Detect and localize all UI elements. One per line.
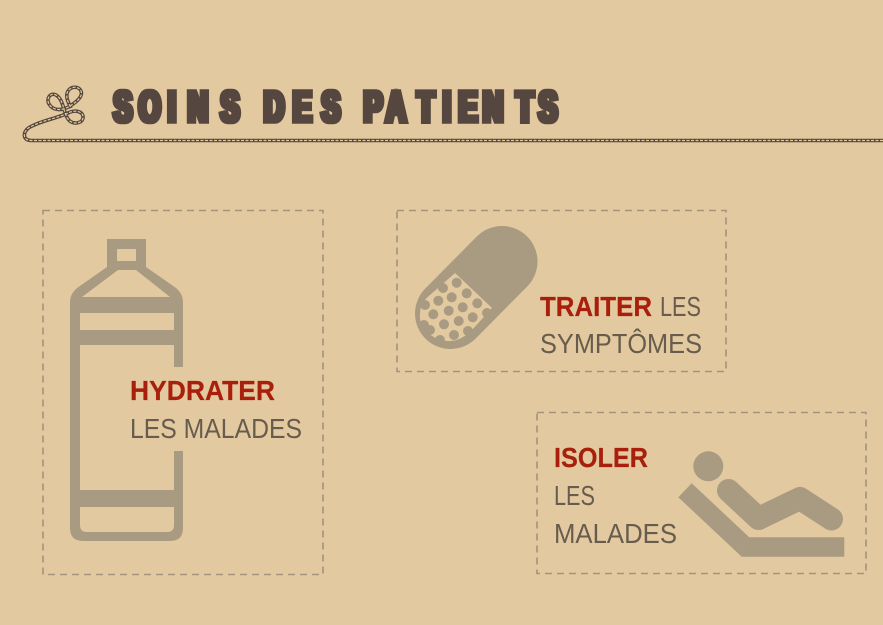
title: SOINS [114, 82, 239, 131]
panel: traiter [397, 210, 726, 372]
text: traiter les symptomes: TRAITER [540, 291, 652, 322]
panel: isoler [537, 412, 866, 574]
icon: rope underline [24, 87, 883, 140]
icon: reclining patient [678, 451, 844, 557]
text: hydrater les malades: LES MALADES [130, 413, 302, 444]
text: traiter les symptomes: SYMPTÔMES [540, 328, 702, 359]
text: isoler les malades [554, 442, 677, 549]
title: PATIENTS [364, 82, 557, 131]
text: isoler les malades: LES [554, 480, 595, 511]
text: hydrater les malades: HYDRATER [130, 375, 275, 406]
text: isoler les malades: MALADES [554, 518, 677, 549]
panel: hydrater [43, 210, 323, 574]
title: DES [264, 82, 340, 131]
text: isoler les malades: ISOLER [554, 442, 648, 473]
icon: capsule [419, 262, 502, 345]
text: hydrater les malades [130, 375, 302, 444]
title [114, 82, 557, 131]
text: traiter les symptomes: LES [660, 291, 701, 322]
icon: water bottle [70, 239, 183, 541]
text: traiter les symptomes [540, 291, 702, 359]
